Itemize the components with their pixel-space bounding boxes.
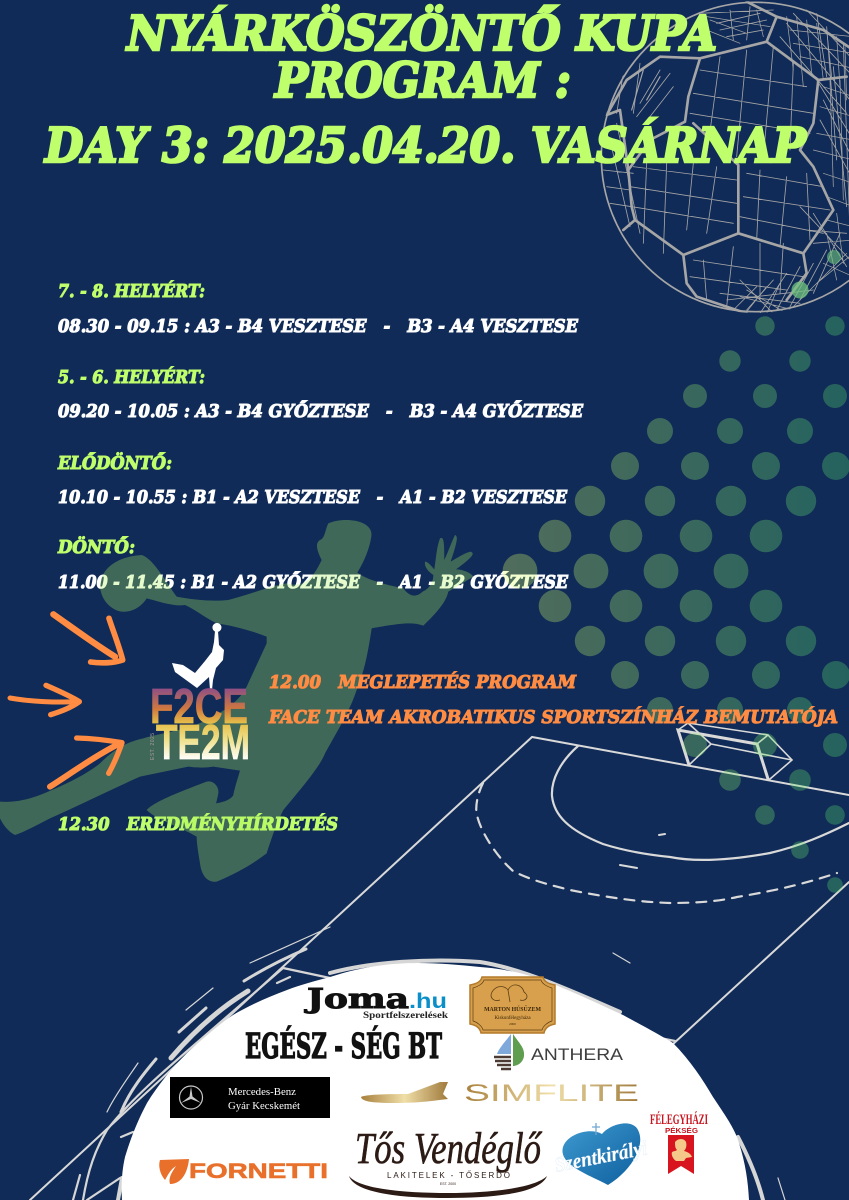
heading: 7-8 place: 7. - 8. HELYÉRT: xyxy=(58,279,205,302)
player silhouette xyxy=(0,520,473,882)
match line 3: 10.10 - 10.55 : B1 - A2 VESZTESE - A1 - B2 VESZTESE xyxy=(58,487,567,508)
Face Team logo xyxy=(150,623,250,770)
arrow 2 xyxy=(10,685,79,715)
Joma logo xyxy=(304,984,449,1021)
logo wordmark line 1: F2CE xyxy=(150,680,248,734)
Szentkirályi logo xyxy=(552,1123,649,1185)
title line 2: PROGRAM : xyxy=(273,53,571,109)
handball sketch xyxy=(601,2,849,313)
brush strokes xyxy=(73,927,785,1200)
match line 1: 08.30 - 09.15 : A3 - B4 VESZTESE - B3 - A4 VESZTESE xyxy=(58,316,578,337)
Joma logo: .hu xyxy=(409,990,447,1013)
sponsor semicircle xyxy=(73,927,785,1200)
Félegyházi Pékség logo: PÉKSÉG xyxy=(665,1126,699,1135)
Simflite logo: SIMFLITE xyxy=(464,1080,639,1107)
main title xyxy=(43,4,808,174)
penalty marks xyxy=(620,834,665,868)
Joma logo: Sportfelszerelések xyxy=(363,1011,449,1021)
Marton Húsüzem badge: 2000 xyxy=(509,1022,516,1026)
Mercedes-Benz badge xyxy=(170,1077,330,1118)
Egész-Ség Bt logo text: EGÉSZ - SÉG BT xyxy=(245,1025,442,1067)
surprise program text xyxy=(268,670,838,728)
Marton Húsüzem badge: Kiskunfélegyháza xyxy=(494,1016,531,1021)
Tős Vendéglő logo: LAKITELEK - TŐSERDŐ xyxy=(387,1171,510,1180)
free throw dashed arc xyxy=(476,783,837,903)
goal area arc xyxy=(552,746,849,860)
heading: semi-final: ELŐDÖNTŐ: xyxy=(57,451,172,474)
white semicircle xyxy=(122,963,749,1200)
title line 1: NYÁRKÖSZÖNTŐ KUPA xyxy=(125,4,717,62)
acrobat figure xyxy=(172,623,224,690)
goal xyxy=(678,723,792,779)
Marton Húsüzem badge: MARTON HÚSÜZEM xyxy=(484,1005,541,1013)
court outline xyxy=(30,737,849,1200)
halftone dot pattern xyxy=(503,316,849,893)
Joma logo: Joma xyxy=(304,984,409,1015)
match line 4: 11.00 - 11.45 : B1 - A2 GYŐZTESE - A1 - B2 GYŐZTESE xyxy=(58,570,568,593)
Tős Vendéglő logo: EST. 2000 xyxy=(440,1182,456,1186)
arrow 1 xyxy=(53,614,123,663)
heading: final: DÖNTŐ: xyxy=(57,535,135,558)
Simflite logo xyxy=(361,1080,639,1107)
Tős Vendéglő logo xyxy=(349,1124,547,1198)
orange arrows xyxy=(10,614,123,787)
Anthera logo: ANTHERA xyxy=(531,1046,623,1064)
match line 2: 09.20 - 10.05 : A3 - B4 GYŐZTESE - B3 - A4 GYŐZTESE xyxy=(58,399,583,422)
Marton Húsüzem badge xyxy=(470,977,555,1033)
heading: 5-6 place: 5. - 6. HELYÉRT: xyxy=(58,365,205,388)
logo wordmark line 2: TE2M xyxy=(156,716,250,770)
Anthera logo xyxy=(494,1034,623,1069)
results announcement: 12.30 EREDMÉNYHÍRDETÉS xyxy=(58,812,338,835)
program time: 12.00 MEGLEPETÉS PROGRAM xyxy=(269,670,577,693)
schedule text xyxy=(57,279,583,835)
Félegyházi Pékség logo: FÉLEGYHÁZI xyxy=(650,1111,708,1128)
Szentkirályi logo: Szentkirályi xyxy=(552,1135,649,1177)
Fornetti logo: FORNETTI xyxy=(189,1160,328,1183)
Mercedes-Benz badge: Mercedes-Benz xyxy=(228,1087,296,1098)
Tős Vendéglő logo: Tős Vendéglő xyxy=(355,1124,543,1173)
arrow 3 xyxy=(50,738,122,787)
dots over ball xyxy=(792,250,841,298)
Mercedes-Benz badge: Gyár Kecskemét xyxy=(228,1101,300,1112)
Fornetti logo xyxy=(159,1159,328,1184)
handball court lines xyxy=(30,723,849,1200)
logo established mark: EST. 2025 xyxy=(150,732,156,760)
Félegyházi Pékség logo xyxy=(650,1111,708,1174)
